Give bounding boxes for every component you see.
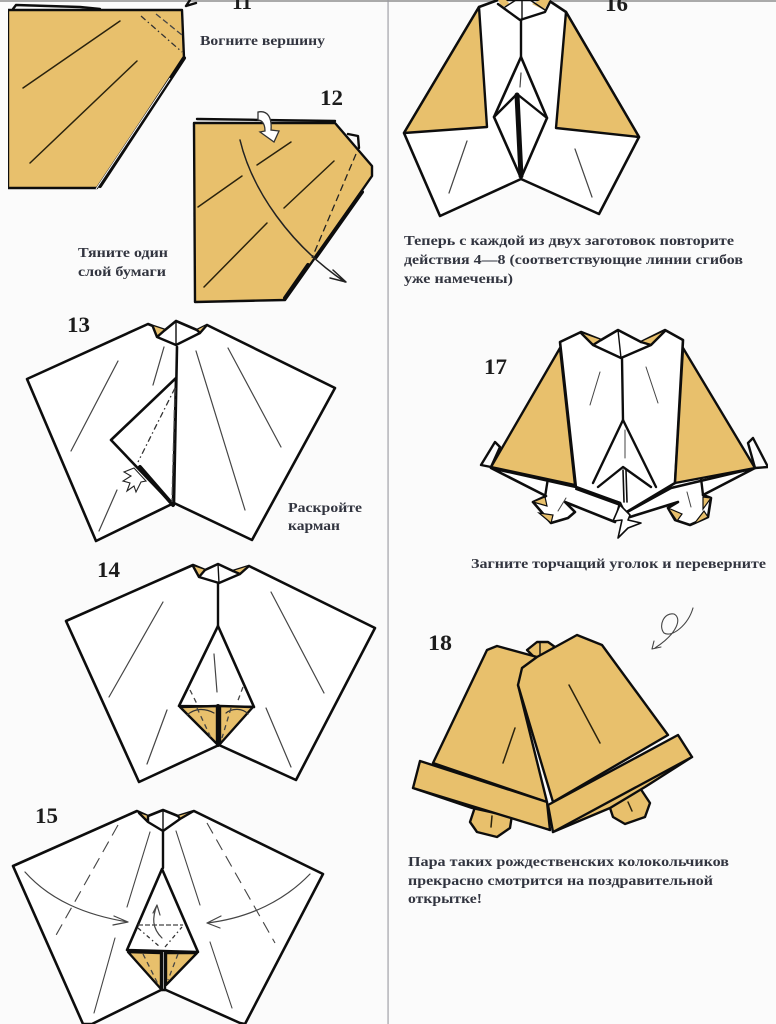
- arrow: right fold: [207, 874, 310, 928]
- caption 13: Раскройте: [288, 501, 362, 516]
- white body: [560, 330, 683, 513]
- caption 13: карман: [288, 519, 340, 534]
- arrow: small up fold: [153, 905, 162, 938]
- left lower arm: [491, 468, 620, 523]
- right bell rim: [548, 735, 692, 832]
- right bell underside: [553, 757, 692, 832]
- triangle flap: [179, 626, 254, 707]
- caption 12: [78, 246, 168, 280]
- open pocket: [111, 378, 176, 505]
- center kite: [593, 420, 656, 487]
- number 12: 12: [320, 85, 343, 110]
- gold right panel: [675, 348, 755, 483]
- number 18: 18: [428, 630, 452, 655]
- caption 16: действия 4—8 (соответствующие линии сгибов: [404, 253, 743, 268]
- gold right panel: [556, 12, 639, 137]
- folded corner: [613, 505, 641, 538]
- gold folded paper: [8, 10, 184, 188]
- step 14 diagram: [66, 564, 375, 782]
- number 14: 14: [97, 557, 120, 582]
- left bell underside: [413, 788, 550, 830]
- icon: fold arrow: [186, 0, 196, 6]
- arrow: pull layer: [240, 140, 346, 282]
- left bell body: [433, 646, 547, 802]
- outer paper shape: [27, 321, 335, 541]
- caption 12: Тяните один: [78, 246, 168, 261]
- caption 16: уже намечены): [404, 272, 513, 287]
- arrow: left fold: [25, 872, 128, 925]
- caption 18: Пара таких рождественских колокольчиков: [408, 855, 730, 870]
- left bell rim: [413, 761, 550, 830]
- step 15 diagram: [13, 810, 323, 1024]
- step 18 diagram: bells: [413, 608, 693, 837]
- caption 18: [408, 855, 730, 907]
- gold left panel: [491, 348, 575, 485]
- caption 16: [404, 234, 743, 287]
- triangle flap: [127, 869, 198, 952]
- caption 17: Загните торчащий уголок и переверните: [471, 557, 766, 572]
- gold paper: [194, 123, 372, 302]
- caption 18: открытке!: [408, 892, 482, 907]
- white body: [404, 0, 639, 216]
- caption 11: Вогните вершину: [200, 34, 325, 49]
- outer paper shape: [66, 564, 375, 782]
- step 13 diagram: [27, 321, 335, 541]
- right clapper: [610, 788, 650, 824]
- collar: [153, 325, 207, 345]
- step 11 diagram: [8, 0, 196, 189]
- icon: white fold arrow: [258, 112, 279, 142]
- icon: tear mark: [123, 468, 146, 492]
- caption 16: Теперь с каждой из двух заготовок повторите: [404, 234, 734, 249]
- caption 12: слой бумаги: [78, 265, 166, 280]
- icon: curled turn-over arrow: [652, 608, 693, 649]
- step 16 diagram: [404, 0, 639, 216]
- step 12 diagram: [194, 112, 372, 302]
- number 13: 13: [67, 312, 90, 337]
- caption 13: [288, 501, 362, 534]
- gold inner triangles: [128, 952, 161, 989]
- left clapper: [470, 807, 512, 837]
- center kite: [494, 57, 547, 178]
- number 17: 17: [484, 354, 507, 379]
- gold left panel: [404, 7, 487, 133]
- caption 18: прекрасно смотрится на поздравительной: [408, 874, 713, 889]
- right bell body: [518, 635, 668, 802]
- number 15: 15: [35, 803, 58, 828]
- right lower arm: [625, 468, 755, 525]
- gold inner triangles: [180, 706, 217, 744]
- step 17 diagram: [481, 330, 768, 538]
- outer paper shape: [13, 810, 323, 1024]
- back tab: [527, 642, 555, 660]
- left and right tabs: [481, 438, 768, 468]
